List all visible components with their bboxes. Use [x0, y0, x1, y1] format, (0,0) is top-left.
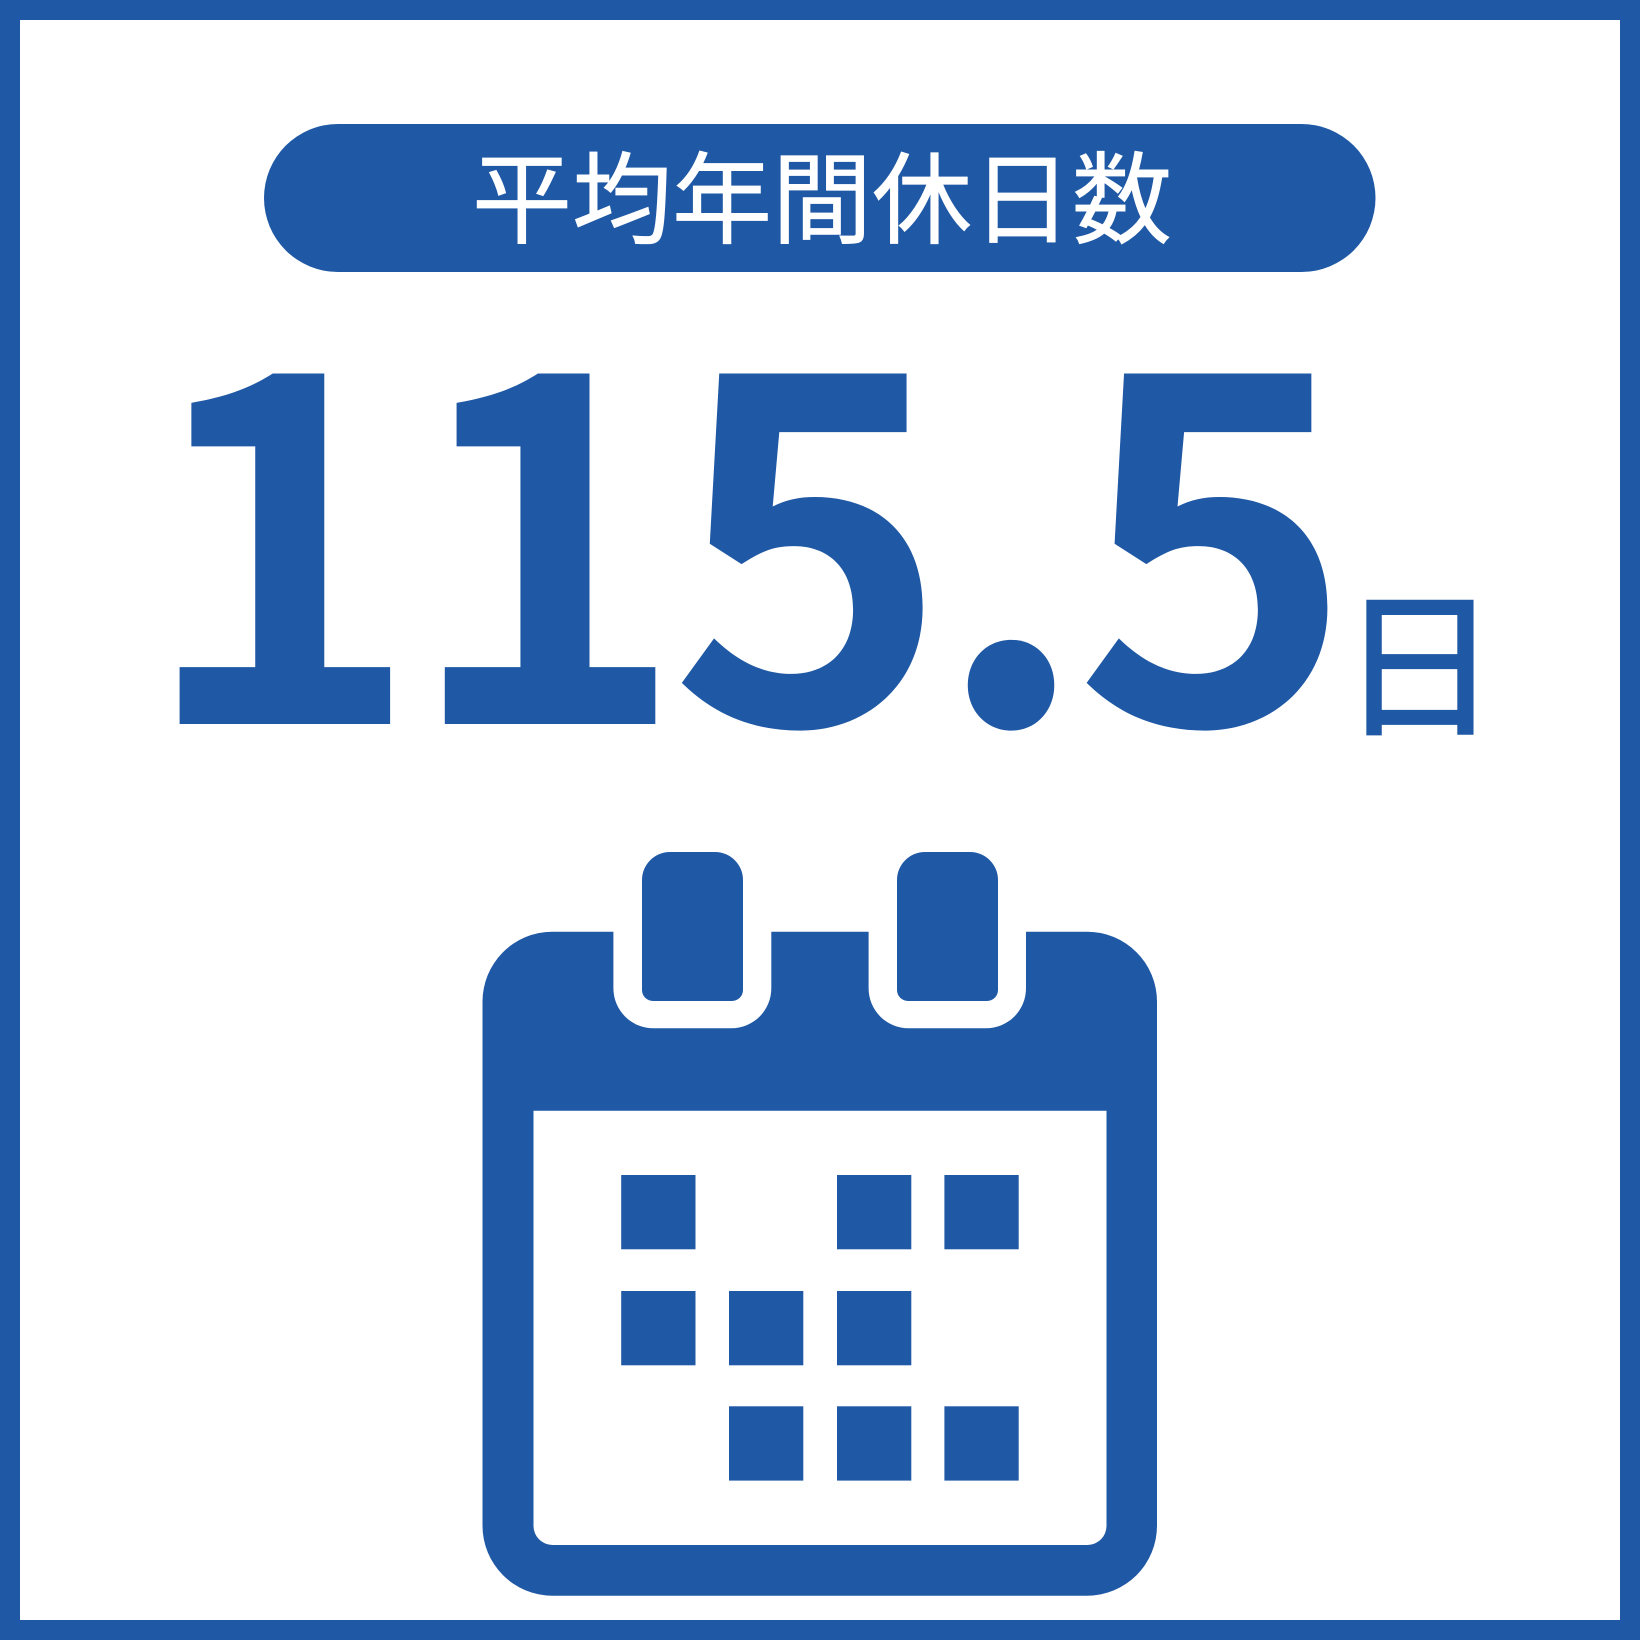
- calendar body: [482, 932, 1157, 1596]
- heading text: 平均年間休日数: [472, 120, 1172, 264]
- unit: days: 日: [1340, 540, 1499, 770]
- icon: calendar: [482, 852, 1157, 1596]
- right ring: [897, 852, 998, 1001]
- heading pill: [264, 120, 1376, 272]
- big number: 115.5 days: 115.5: [141, 176, 1353, 861]
- calendar day squares: [621, 1175, 1019, 1481]
- left ring: [642, 852, 743, 1001]
